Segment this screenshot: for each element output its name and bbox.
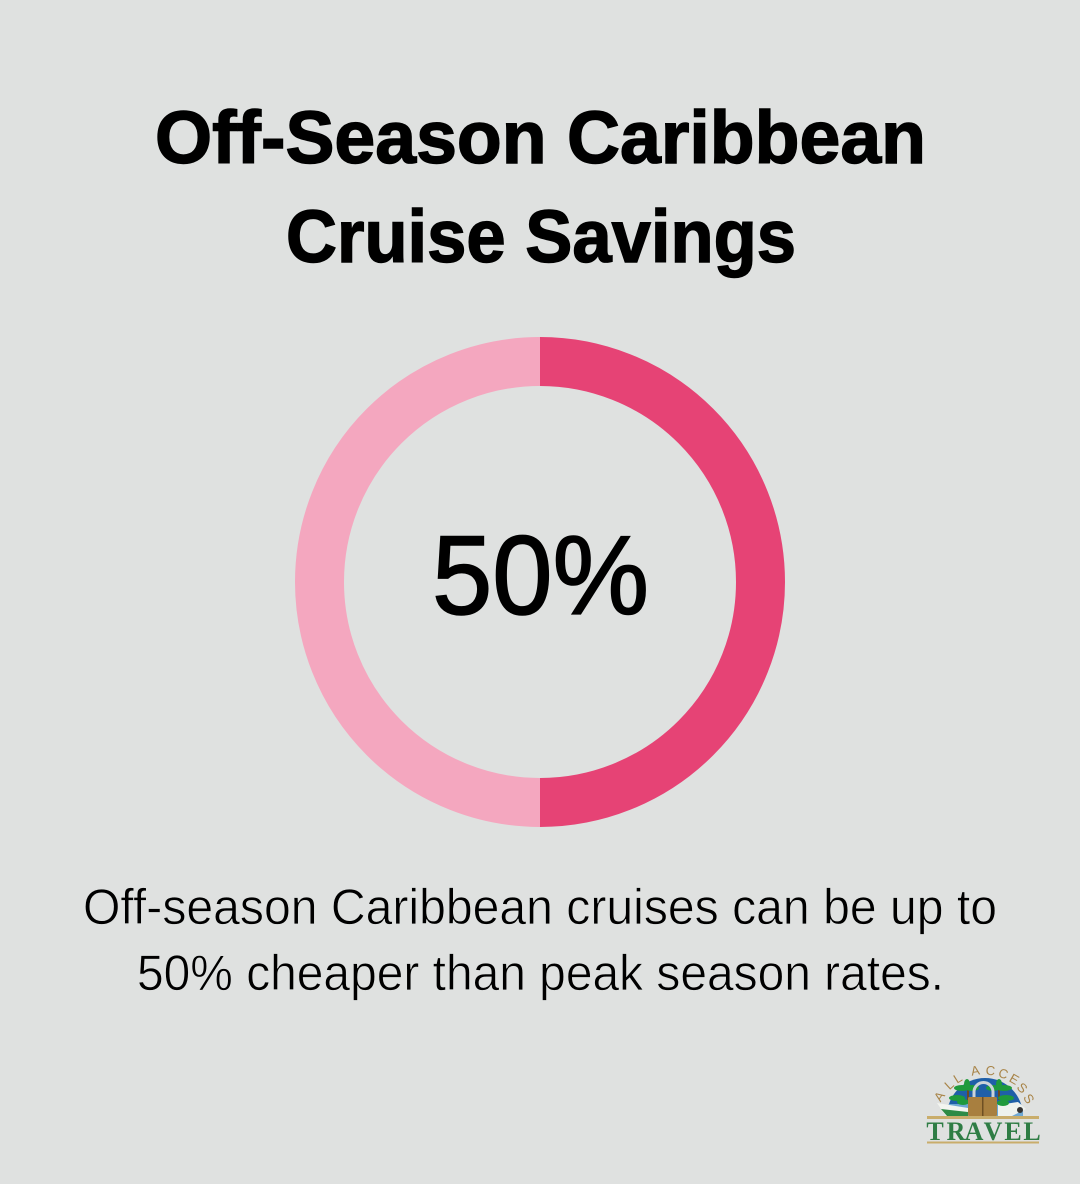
remaining half of ring (320, 362, 540, 802)
logo padlock (974, 1082, 993, 1098)
logo arc text: C (997, 1065, 1010, 1082)
logo arc text: E (1007, 1070, 1022, 1088)
logo wordmark: E (1004, 1117, 1022, 1146)
logo horizon (947, 1104, 1023, 1116)
center value: 50% (432, 513, 649, 638)
logo bottom bar (927, 1142, 1039, 1144)
title (155, 96, 926, 278)
logo arc text: A (970, 1062, 981, 1079)
logo wordmark: V (984, 1117, 1003, 1146)
logo arc text: S (1020, 1091, 1038, 1107)
title: Cruise Savings (286, 195, 796, 278)
logo wordmark: A (965, 1117, 984, 1146)
logo arc text: S (1014, 1079, 1031, 1096)
logo arc text: C (985, 1063, 996, 1078)
logo palm trees (949, 1079, 1014, 1106)
logo: All Access Travel (926, 1062, 1041, 1146)
description text: 50% cheaper than peak season rates. (137, 945, 944, 1001)
donut chart: 50% (320, 362, 760, 802)
logo wordmark (926, 1117, 1041, 1146)
title: Off-Season Caribbean (155, 96, 926, 179)
logo arc text: A (931, 1088, 948, 1104)
logo arc text: L (951, 1070, 965, 1086)
logo arc text: L (941, 1077, 957, 1093)
description text (83, 879, 997, 1001)
logo boats (937, 1103, 968, 1116)
highlighted half of ring (540, 362, 760, 802)
logo wordmark: T (926, 1117, 944, 1146)
logo wordmark: L (1023, 1117, 1041, 1146)
logo dome (947, 1078, 1023, 1116)
logo arc text (931, 1062, 1038, 1107)
logo top bar (927, 1116, 1039, 1119)
description text: Off-season Caribbean cruises can be up to (83, 879, 997, 935)
logo wordmark: R (947, 1117, 966, 1146)
